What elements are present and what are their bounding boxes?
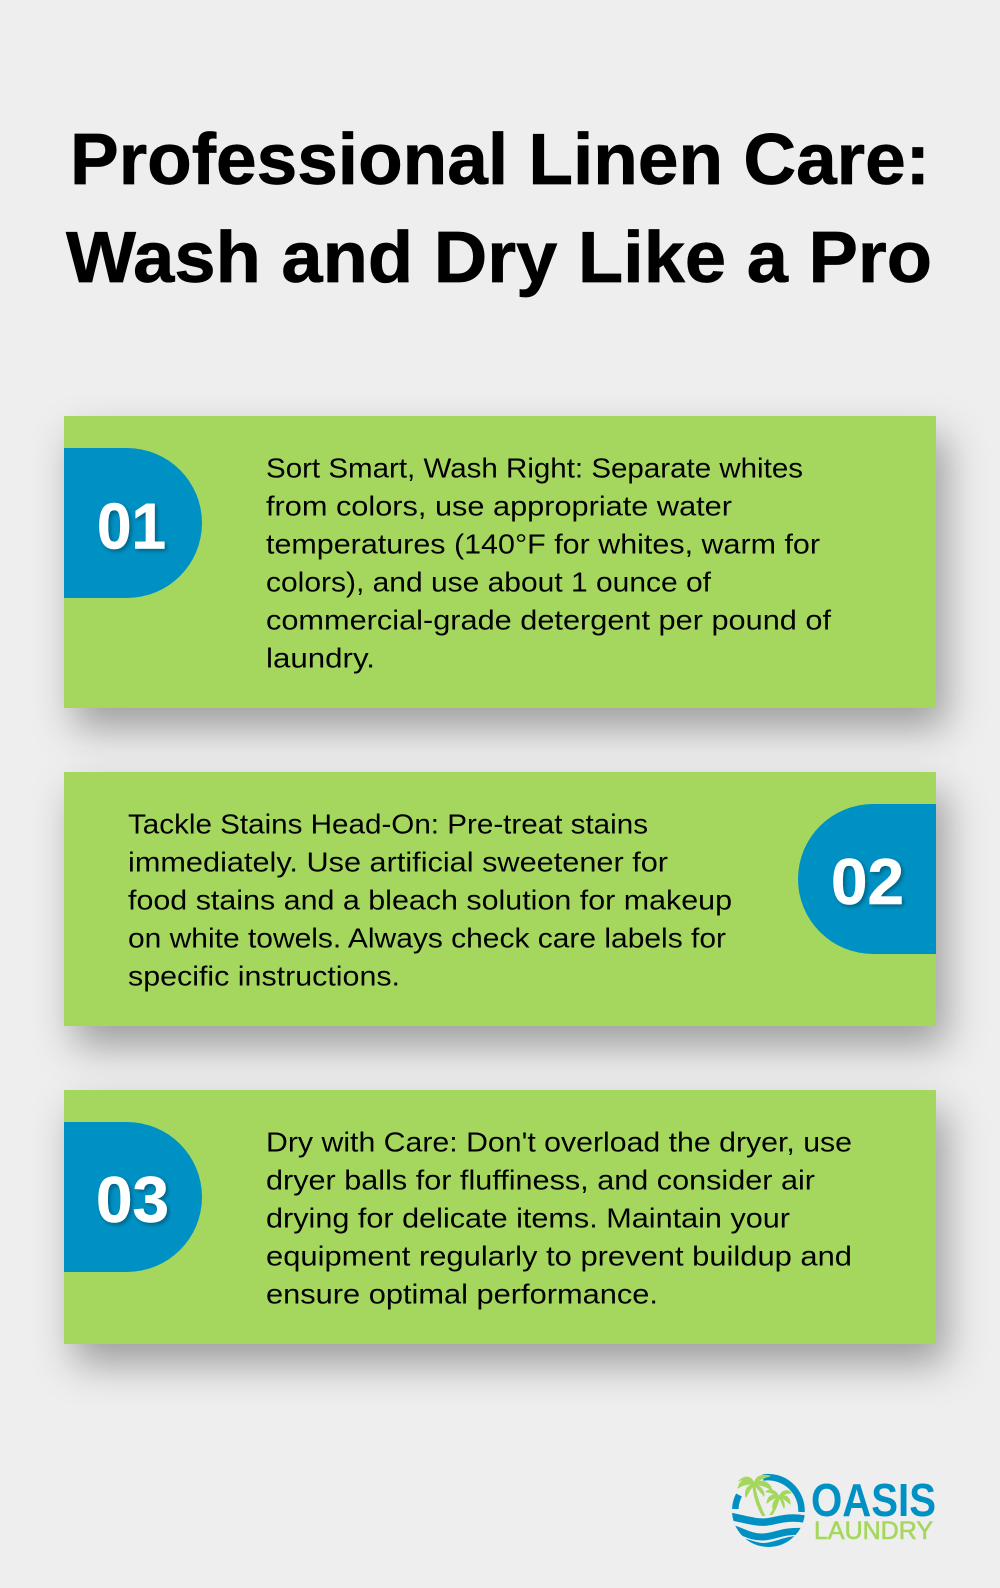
- text: tackle stains head-on: food stains and a bleach solution for makeup: [128, 884, 732, 916]
- text: dry with care: ensure optimal performance.: [266, 1278, 658, 1310]
- badge: 02: 02: [831, 845, 904, 918]
- title: [66, 120, 932, 298]
- panel: step 02: [64, 772, 936, 1026]
- text: sort smart, wash right: temperatures (140°F for whites, warm for: [266, 528, 820, 560]
- text: sort smart, wash right: from colors, use appropriate water: [266, 490, 732, 522]
- text: dry with care: [266, 1126, 852, 1310]
- text: tackle stains head-on: immediately. Use artificial sweetener for: [128, 846, 668, 878]
- badge: 03: 03: [96, 1163, 169, 1236]
- badge: 01: 01: [97, 490, 166, 562]
- icon: waves: [728, 1516, 810, 1548]
- icon: palm trees: [738, 1475, 791, 1516]
- text: sort smart, wash right: commercial-grade detergent per pound of: [266, 604, 831, 636]
- text: sort smart, wash right: colors), and use about 1 ounce of: [266, 566, 711, 598]
- title: Professional Linen Care:: [70, 120, 930, 200]
- text: sort smart, wash right: Sort Smart, Wash Right: Separate whites: [266, 452, 803, 484]
- logo: oasis laundry: [728, 1474, 936, 1548]
- logo wordmark: OASIS: [811, 1474, 936, 1526]
- title: Wash and Dry Like a Pro: [66, 218, 932, 298]
- text: dry with care: drying for delicate items. Maintain your: [266, 1202, 790, 1234]
- badge: 02: [798, 804, 936, 954]
- text: tackle stains head-on: specific instructions.: [128, 960, 400, 992]
- text: tackle stains head-on: [128, 808, 732, 992]
- text: sort smart, wash right: [266, 452, 831, 674]
- text: dry with care: equipment regularly to prevent buildup and: [266, 1240, 852, 1272]
- badge: 03: [64, 1122, 202, 1272]
- text: dry with care: Dry with Care: Don't overload the dryer, use: [266, 1126, 852, 1158]
- panel: step 03: [64, 1090, 936, 1344]
- text: dry with care: dryer balls for fluffiness, and consider air: [266, 1164, 815, 1196]
- text: sort smart, wash right: laundry.: [266, 642, 375, 674]
- icon: sun ring: [735, 1477, 802, 1512]
- text: tackle stains head-on: on white towels. Always check care labels for: [128, 922, 726, 954]
- text: tackle stains head-on: Tackle Stains Head-On: Pre-treat stains: [128, 808, 648, 840]
- logo wordmark: LAUNDRY: [814, 1517, 933, 1545]
- panel: step 01: [64, 416, 936, 708]
- logo wordmark: [811, 1474, 936, 1545]
- badge: 01: [64, 448, 202, 598]
